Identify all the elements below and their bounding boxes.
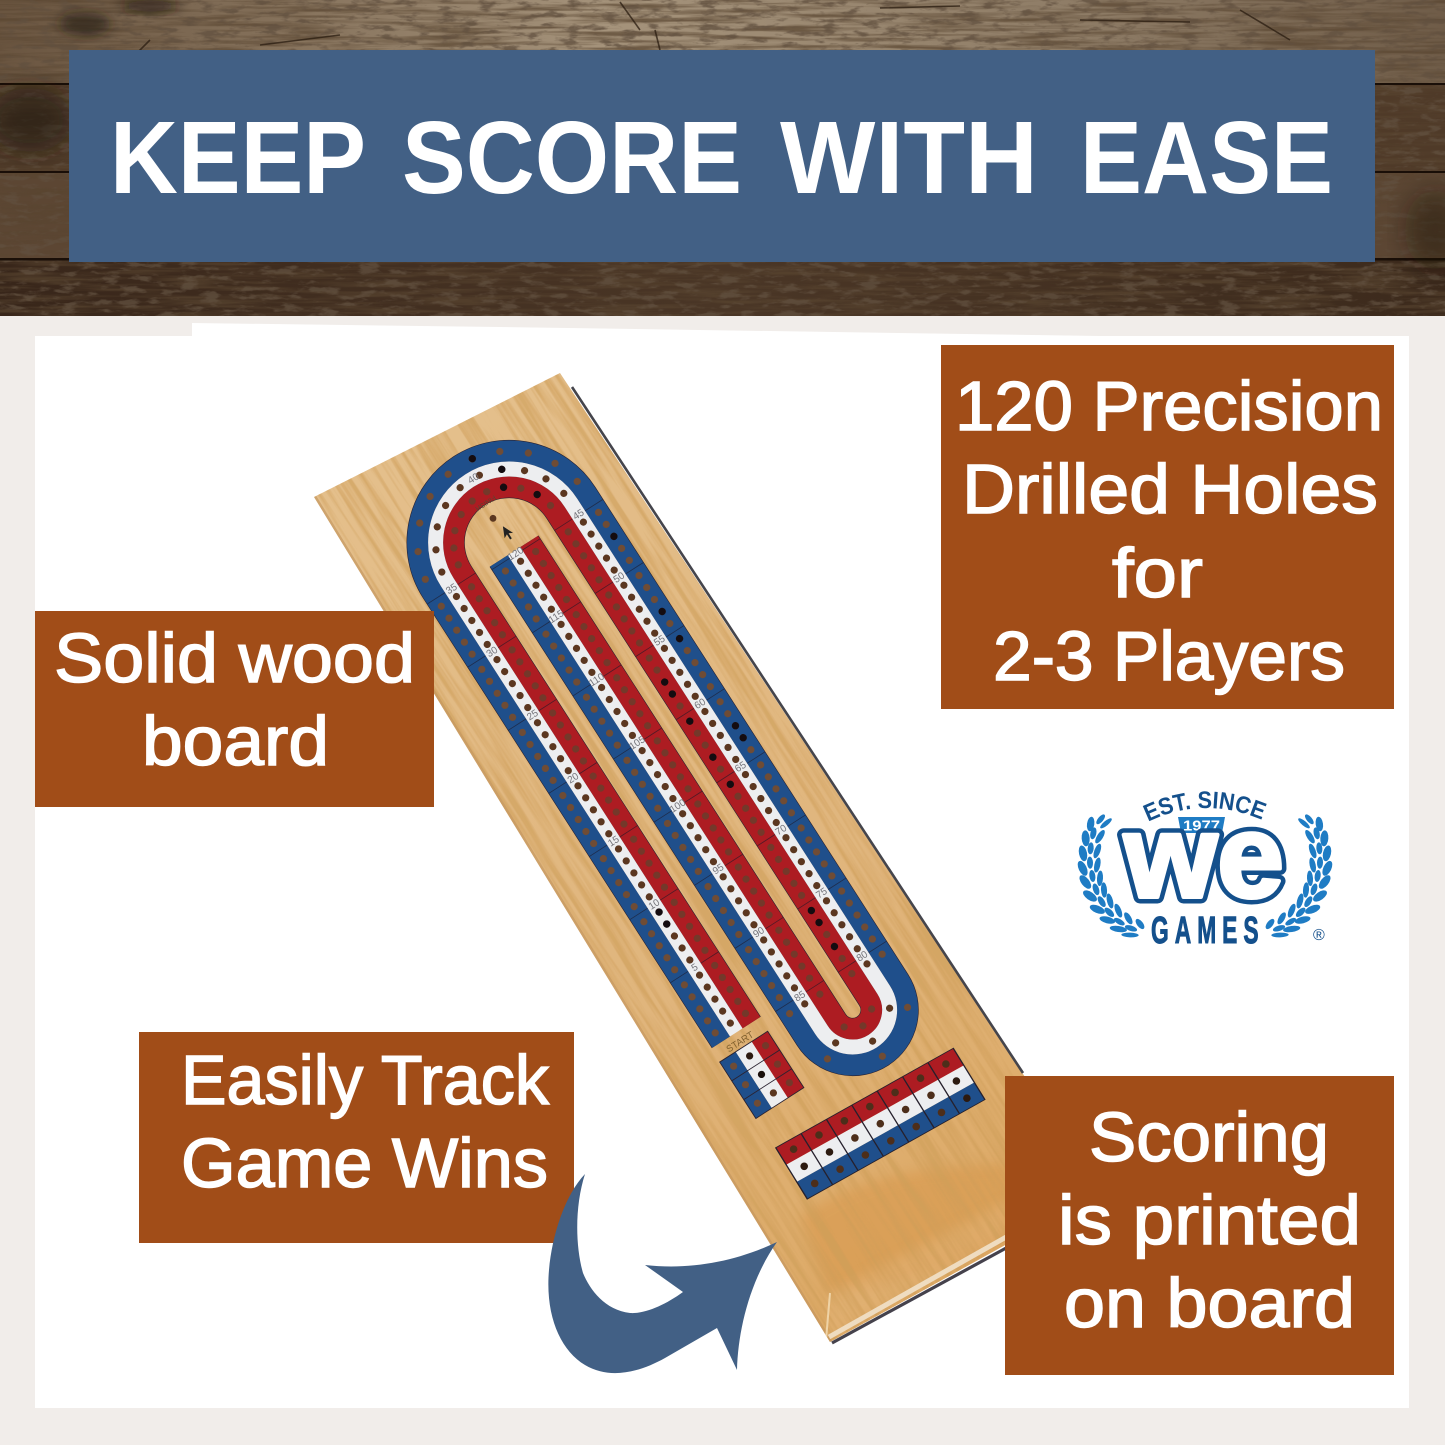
callout: 120 precision drilled holes: for <box>1112 534 1203 612</box>
callout: scoring is printed on board: Scoring <box>1089 1098 1329 1176</box>
game win peg block <box>776 1048 985 1199</box>
peg holes <box>383 416 929 1125</box>
track numbers: 35 <box>444 581 460 597</box>
logo: we wordmark: we <box>1123 791 1284 923</box>
logo: we wordmark: we <box>1123 791 1284 923</box>
track numbers: 20 <box>566 771 581 786</box>
callout: scoring is printed on board <box>1005 1076 1394 1375</box>
track numbers <box>400 434 870 1044</box>
track numbers: 70 <box>774 823 789 838</box>
callout: solid wood board: Solid wood <box>54 619 415 697</box>
track numbers: 50 <box>612 570 627 586</box>
icon: laurel wreath <box>1076 813 1334 938</box>
start label: START <box>725 1029 756 1055</box>
callout: solid wood board <box>35 611 434 807</box>
track numbers: 65 <box>733 760 749 775</box>
track numbers: 45 <box>571 507 587 523</box>
track numbers: 90 <box>751 925 767 940</box>
callout: 120 precision drilled holes: 2-3 Players <box>993 617 1345 695</box>
start block <box>720 1031 804 1118</box>
track numbers: 60 <box>693 696 708 712</box>
callout: scoring is printed on board: on board <box>1064 1264 1355 1342</box>
track numbers: 80 <box>855 949 870 964</box>
wood plank header background <box>0 0 1445 316</box>
title text: WITH <box>780 100 1038 215</box>
logo: registered mark: ® <box>1313 927 1325 944</box>
red lane <box>432 466 879 1076</box>
arrow: curved blue arrow to board <box>548 1174 777 1373</box>
track outline <box>383 416 929 1125</box>
track numbers: 15 <box>606 834 622 849</box>
track numbers: 95 <box>711 862 727 877</box>
black empty holes <box>393 412 870 1021</box>
title text: KEEP <box>110 100 366 215</box>
track numbers: 120 <box>506 545 526 563</box>
logo: games: GAMES <box>1151 909 1265 951</box>
track numbers: 100 <box>668 797 688 816</box>
blue lane <box>383 416 929 1125</box>
track numbers: 115 <box>547 608 567 626</box>
track numbers: 85 <box>792 989 808 1004</box>
board body <box>314 373 1024 1344</box>
title banner <box>69 50 1375 262</box>
tracks, holes and numbers in board coordinates <box>371 412 932 1132</box>
logo: 1977 banner: 1977 <box>1183 818 1220 834</box>
finish marker <box>474 493 519 546</box>
track numbers: 40 <box>466 471 482 487</box>
track numbers: 75 <box>814 886 830 901</box>
five-hole group dividers <box>435 498 878 1047</box>
track numbers: 30 <box>485 645 500 660</box>
callout: easily track game wins: Easily Track <box>181 1041 550 1119</box>
callout: 120 precision drilled holes <box>941 345 1394 709</box>
callout: solid wood board: board <box>142 702 329 780</box>
title text: EASE <box>1080 100 1333 215</box>
track numbers: 110 <box>587 671 607 689</box>
title text: SCORE <box>402 100 742 215</box>
logo: est. since arc text: EST. SINCE <box>1142 791 1267 822</box>
white lane <box>408 441 904 1101</box>
callout: easily track game wins <box>139 1032 574 1243</box>
callout: scoring is printed on board: is printed <box>1058 1181 1361 1259</box>
track numbers: 10 <box>647 897 662 913</box>
callout: 120 precision drilled holes: 120 Precision <box>955 367 1383 445</box>
cribbage board <box>314 373 1024 1344</box>
track numbers: 105 <box>628 734 648 753</box>
track numbers: 5 <box>690 962 701 974</box>
track numbers: 55 <box>652 633 668 649</box>
title text <box>110 100 1333 215</box>
white content panel <box>35 323 1409 1408</box>
finish marker: FINISH <box>474 493 497 512</box>
track numbers: 25 <box>525 708 541 723</box>
callout: easily track game wins: Game Wins <box>181 1124 548 1202</box>
callout: 120 precision drilled holes: Drilled Holes <box>962 450 1378 528</box>
logo: 1977 banner <box>1178 817 1225 834</box>
logo: WE Games <box>1078 791 1332 951</box>
